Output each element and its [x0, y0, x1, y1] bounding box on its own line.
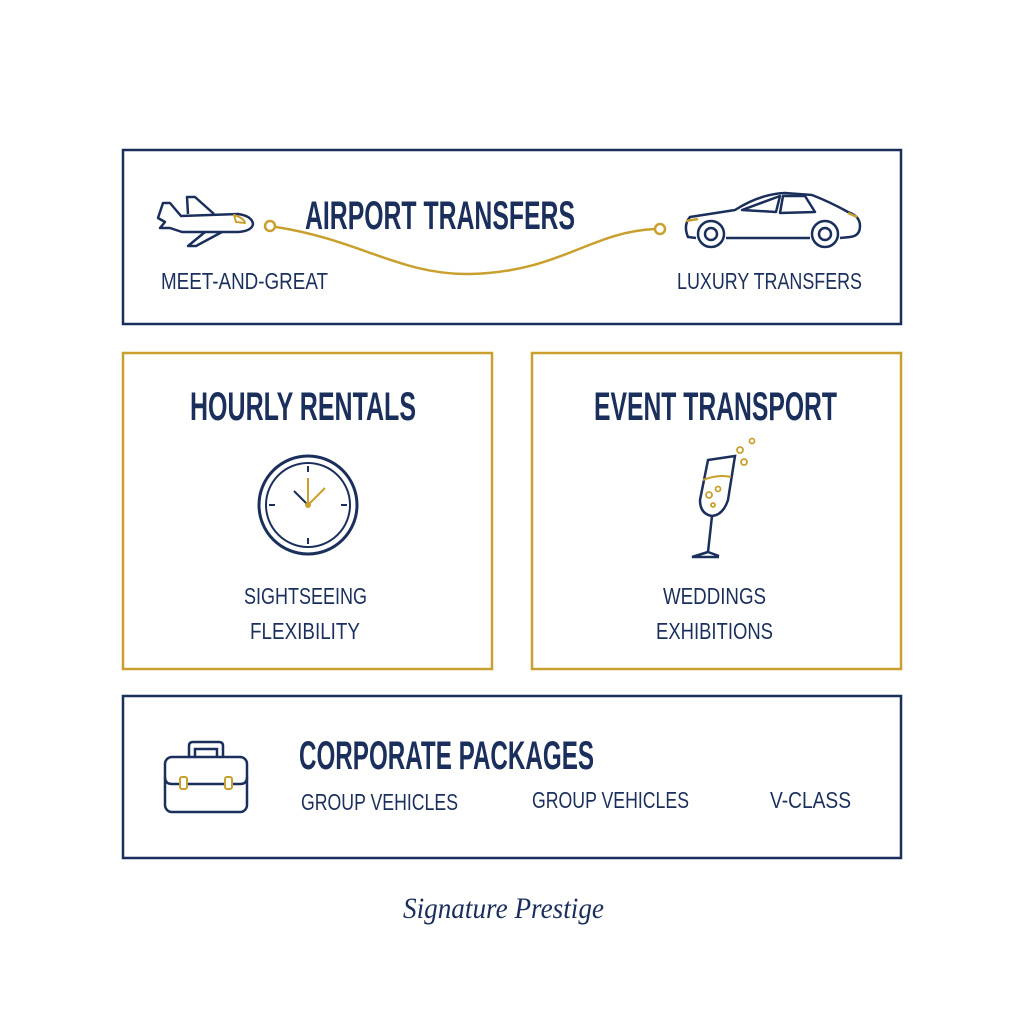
heading: EVENT TRANSPORT [594, 385, 837, 429]
text: sightseeing: SIGHTSEEING [244, 583, 367, 609]
panel: event transport [532, 353, 901, 669]
text: flexibility: FLEXIBILITY [250, 618, 360, 644]
text: exhibitions: EXHIBITIONS [656, 618, 773, 644]
icon: champagne glass [692, 438, 754, 557]
icon: clock [259, 456, 357, 554]
heading: CORPORATE PACKAGES [299, 734, 594, 778]
text: group vehicles 1: GROUP VEHICLES [301, 789, 458, 815]
text: group vehicles 2: GROUP VEHICLES [532, 787, 689, 813]
text: weddings: WEDDINGS [663, 583, 766, 609]
signature: Signature Prestige [403, 892, 604, 925]
text: v-class: V-CLASS [770, 787, 851, 813]
icon: car [686, 193, 860, 247]
panel: hourly rentals [123, 353, 492, 669]
panel: corporate packages [123, 696, 901, 858]
heading: HOURLY RENTALS [190, 385, 416, 429]
panel: airport transfers [123, 150, 901, 324]
icon: airplane [158, 197, 253, 246]
text: luxury transfers: LUXURY TRANSFERS [677, 268, 862, 294]
icon: briefcase [165, 742, 247, 812]
text: meet-and-great: MEET-AND-GREAT [161, 268, 328, 294]
heading: AIRPORT TRANSFERS [305, 194, 575, 238]
connector curve [265, 221, 665, 274]
